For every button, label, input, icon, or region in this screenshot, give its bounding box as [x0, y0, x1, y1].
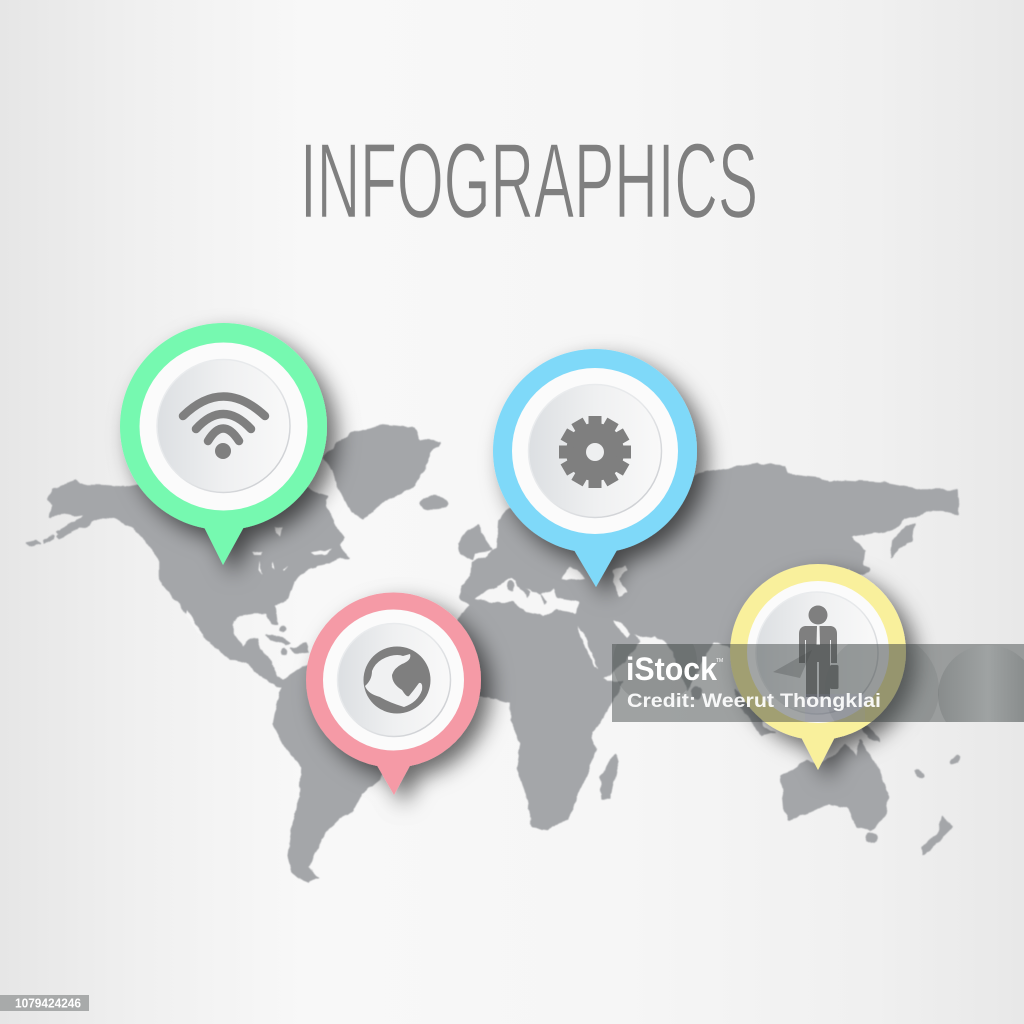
Australia: [782, 740, 888, 830]
blue pin body: [493, 349, 697, 587]
Bahamas: [280, 628, 286, 632]
Cuba and Caribbean: [266, 635, 309, 652]
New Guinea: [860, 720, 880, 742]
United Kingdom: [459, 526, 492, 560]
white ring: [140, 342, 308, 510]
Tasmania: [865, 833, 877, 843]
Kyushu: [851, 566, 869, 574]
pin: globe: [306, 592, 481, 795]
watermark trademark: TM: [716, 658, 723, 664]
watermark logo: iStock: [626, 651, 717, 687]
inner disc: [157, 360, 290, 492]
seas and lakes: [186, 527, 630, 669]
Persian Gulf: [614, 619, 630, 638]
Sri Lanka: [693, 687, 701, 699]
watermark band: [612, 644, 1024, 722]
Gulf of California: [186, 610, 203, 635]
Sardinia and Corsica: [508, 581, 514, 591]
Black Sea: [561, 567, 585, 581]
Hudson Bay and Gulf of St Lawrence: [273, 527, 332, 555]
Aleutian islands: [28, 530, 72, 546]
inner disc: [756, 592, 878, 714]
North and Central America: [47, 470, 348, 686]
Red Sea: [577, 626, 598, 669]
Pacific islands: [950, 755, 960, 765]
Caspian Sea: [612, 566, 628, 596]
Iceland: [421, 497, 447, 509]
world map: [28, 425, 960, 882]
white ring: [512, 368, 678, 534]
icon: wifi: [183, 396, 265, 459]
icon: businessman: [799, 606, 838, 697]
South America: [273, 650, 415, 882]
Greenland: [323, 425, 440, 519]
Italy: [514, 576, 531, 597]
pink pin body: [306, 592, 481, 795]
Indonesia: [736, 690, 775, 735]
pin: wifi: [120, 323, 327, 565]
Japan: [891, 523, 915, 557]
white ring: [747, 581, 889, 723]
Balearic islands: [490, 584, 496, 590]
white ring: [323, 610, 464, 750]
green pin body: [120, 323, 327, 565]
Great Lakes: [251, 552, 288, 574]
Jamaica: [281, 649, 287, 655]
icon: globe: [364, 646, 430, 714]
image id label: [0, 995, 89, 1011]
Mediterranean land: [490, 576, 547, 605]
inner disc: [338, 624, 450, 736]
band texture: [614, 644, 1024, 722]
icon: gear: [559, 416, 631, 488]
image id label: 1079424246: [15, 996, 81, 1010]
yellow pin body: [730, 564, 906, 770]
pin: gear: [493, 349, 697, 587]
inner disc: [528, 384, 662, 518]
watermark credit: Credit: Weerut Thongklai: [627, 691, 881, 712]
Mediterranean Sea: [474, 578, 578, 616]
pin: businessman: [730, 564, 906, 770]
Madagascar: [600, 755, 619, 798]
New Zealand: [922, 817, 953, 854]
Greece: [540, 592, 547, 605]
Eurasia and Africa: [440, 464, 958, 829]
Pacific islands 2: [914, 768, 926, 780]
